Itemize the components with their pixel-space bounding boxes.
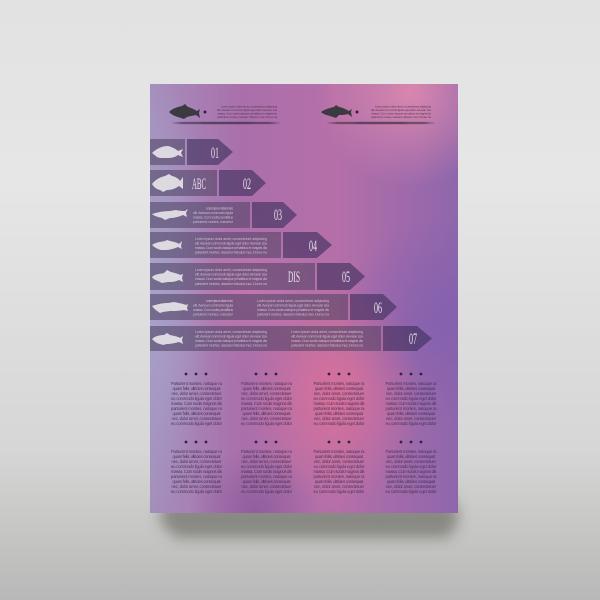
- paragraph: nec, dolor amet, consectetuer: [242, 459, 292, 464]
- row text: elit. Aenean commodo ligula eget dolor. Aenean ssa: [195, 242, 267, 246]
- row text right: Lorem ipsum dolor amet, consectetuer adipiscing: [257, 299, 329, 303]
- column 3 lower: [314, 441, 365, 494]
- paragraph: quam felis, ultricies consequat: [387, 386, 436, 391]
- paragraph: massa. Cum sociis magnos dis: [386, 469, 436, 474]
- paragraph: parturient montes, natoque ra: [314, 406, 365, 411]
- paragraph: nec, dolor amet, consectetuer: [386, 391, 437, 396]
- number 06: 06: [374, 300, 382, 317]
- row text: parturient montes, nascetur ridiculus mus. Donec na: [195, 251, 267, 255]
- paragraph: nec, dolor amet, consectetuer: [242, 416, 292, 421]
- paragraph: eu commodo ligula eget dolor: [241, 396, 293, 401]
- number 04: 04: [309, 238, 317, 255]
- column 3 upper: [314, 373, 365, 426]
- icon: slim fish: [152, 240, 182, 250]
- paragraph: nec, dolor amet, consectetuer: [386, 416, 437, 421]
- paragraph: eu commodo ligula eget dolor: [386, 489, 437, 494]
- column 4 upper: [386, 373, 437, 426]
- paragraph: parturient montes, natoque ra: [171, 474, 223, 479]
- poster page: [150, 84, 458, 513]
- icon: dark trout: [321, 105, 352, 118]
- paragraph: eu commodo ligula eget dolor: [171, 489, 223, 494]
- paragraph: eu commodo ligula eget dolor: [171, 464, 223, 469]
- paragraph: quam felis, ultricies consequat: [242, 454, 291, 459]
- icon: trout: [152, 333, 183, 345]
- panel: [150, 232, 281, 258]
- paragraph: [171, 449, 223, 494]
- row text left: massa. Cum sociis natoque penatibus et magnis dis: [195, 339, 267, 343]
- paragraph: eu commodo ligula eget dolor: [386, 464, 437, 469]
- icon: fish: [152, 146, 183, 158]
- arrow 04: [283, 232, 332, 258]
- paragraph: eu commodo ligula eget dolor: [386, 421, 437, 426]
- row text: massa. Cum sociis natoque penatibus et magnis dis: [195, 277, 267, 281]
- row text right: Lorem ipsum dolor amet, consectetuer adipiscing: [291, 330, 363, 334]
- panel: [150, 202, 250, 228]
- number 05: 05: [342, 269, 350, 286]
- paragraph: Parturient montes, natoque ra: [171, 381, 223, 386]
- paragraph: quam felis, ultricies consequat: [242, 386, 291, 391]
- paragraph: [314, 449, 365, 494]
- paragraph: quam felis, ultricies consequat: [315, 386, 364, 391]
- paragraph: massa. Cum sociis magnos dis: [386, 401, 436, 406]
- paragraph: nec, dolor amet, consectetuer: [314, 459, 365, 464]
- icon: dark fish: [169, 104, 200, 119]
- paragraph: massa. Cum sociis magnos dis: [241, 401, 292, 406]
- paragraph: parturient montes, natoque ra: [386, 406, 437, 411]
- three dots: [185, 373, 207, 375]
- row 01: [150, 139, 233, 165]
- panel: [150, 170, 217, 196]
- paragraph: eu commodo ligula eget dolor: [314, 489, 365, 494]
- panel: [150, 263, 315, 290]
- three dots: [255, 441, 277, 443]
- arrow 06: [350, 294, 397, 320]
- row text right: parturient montes, nascetur ridiculus mus. Donec na: [257, 312, 329, 316]
- paragraph: quam felis, ultricies consequat: [387, 479, 436, 484]
- paragraph: parturient montes, natoque ra: [314, 474, 365, 479]
- row 02: ABC: [192, 176, 206, 193]
- panel: [150, 139, 185, 165]
- row text: massa. Cum sociis natoque penatibus et magnis dis: [195, 246, 267, 250]
- paragraph: [241, 449, 293, 494]
- paragraph: nec, dolor amet, consectetuer: [172, 459, 222, 464]
- paragraph: Parturient montes, natoque ra: [314, 449, 365, 454]
- number 03: 03: [274, 207, 282, 224]
- row text: Lorem ipsum dolor amet, consectetuer adipiscing: [195, 237, 267, 241]
- row text right: elit. Aenean commodo ligula eget dolor. Aenean ssa: [291, 334, 363, 338]
- page shadow: [158, 495, 460, 538]
- panel: [150, 294, 348, 320]
- row text left: massa. Cum sociis penatibus: [193, 308, 233, 312]
- row text left: elit. Aenean commodo ligula: [193, 304, 233, 308]
- paragraph: quam felis, ultricies consequat: [172, 411, 221, 416]
- header description text: Lorem ipsum dolor amet, consectetuer adipiscing: [375, 104, 431, 108]
- paragraph: parturient montes, natoque ra: [241, 474, 293, 479]
- bullet dot: [356, 110, 358, 114]
- paragraph: nec, dolor amet, consectetuer: [314, 391, 365, 396]
- row text right: massa. Cum sociis natoque penatibus et magnis dis: [257, 308, 329, 312]
- paragraph: massa. Cum sociis magnos dis: [241, 469, 292, 474]
- paragraph: quam felis, ultricies consequat: [315, 454, 364, 459]
- row text: Lorem ipsum dolor amet,: [206, 206, 233, 210]
- paragraph: quam felis, ultricies consequat: [242, 411, 291, 416]
- row 02: [150, 170, 266, 196]
- number 01: 01: [211, 145, 219, 162]
- column 4 lower: [386, 441, 437, 494]
- three dots: [185, 441, 207, 443]
- paragraph: eu commodo ligula eget dolor: [386, 396, 437, 401]
- paragraph: massa. Cum sociis magnos dis: [314, 469, 364, 474]
- paragraph: quam felis, ultricies consequat: [172, 386, 221, 391]
- header description text: parturient montes, nascetur ridiculus mus. Donec na: [217, 115, 277, 119]
- row text right: [291, 330, 363, 347]
- row text: elit. Aenean commodo ligula eget dolor. Aenean ssa: [195, 273, 267, 277]
- row text: Lorem ipsum dolor amet, consectetuer adipiscing: [195, 268, 267, 272]
- row text left: [195, 330, 267, 347]
- row text right: [257, 299, 329, 316]
- paragraph: massa. Cum sociis magnos dis: [314, 401, 364, 406]
- paragraph: eu commodo ligula eget dolor: [241, 464, 293, 469]
- column 1 upper: [171, 373, 223, 426]
- paragraph: quam felis, ultricies consequat: [387, 411, 436, 416]
- row text: parturient montes, nascetur: [193, 220, 234, 224]
- header description text: [217, 104, 278, 119]
- shadow rule: [327, 122, 435, 124]
- paragraph: quam felis, ultricies consequat: [172, 454, 221, 459]
- row 03: [150, 202, 297, 228]
- header item: right fish: [321, 104, 435, 124]
- paragraph: quam felis, ultricies consequat: [242, 479, 291, 484]
- paragraph: Parturient montes, natoque ra: [241, 449, 293, 454]
- arrow 03: [252, 202, 297, 228]
- arrow 02: [219, 170, 266, 196]
- header description text: elit. Aenean commodo ligula eget dolor. Aenean ssa: [371, 108, 431, 112]
- header description text: [371, 104, 432, 119]
- row text: [195, 237, 267, 255]
- paragraph: Parturient montes, natoque ra: [386, 381, 437, 386]
- row text: elit. Aenean commodo ligula: [193, 211, 233, 215]
- header description text: massa. Cum sociis natoque penatibus et magnis dis: [217, 112, 278, 116]
- row 07: [150, 326, 432, 351]
- paragraph: nec, dolor amet, consectetuer: [386, 459, 437, 464]
- paragraph: eu commodo ligula eget dolor: [314, 396, 365, 401]
- paragraph: Parturient montes, natoque ra: [314, 381, 365, 386]
- number 02: 02: [243, 176, 251, 193]
- paragraph: [386, 449, 437, 494]
- row text left: parturient montes, nascetur ridiculus mus. Donec na: [195, 343, 267, 347]
- header description text: elit. Aenean commodo ligula eget dolor. Aenean ssa: [217, 108, 277, 112]
- arrow 07: [383, 326, 432, 351]
- paragraph: quam felis, ultricies consequat: [315, 411, 364, 416]
- paragraph: eu commodo ligula eget dolor: [241, 489, 293, 494]
- paragraph: nec, dolor amet, consectetuer: [242, 391, 292, 396]
- three dots: [328, 441, 350, 443]
- paragraph: Parturient montes, natoque ra: [171, 449, 223, 454]
- three dots: [400, 441, 422, 443]
- paragraph: [386, 381, 437, 426]
- arrow 05: [317, 263, 365, 290]
- row text left: Lorem ipsum dolor amet,: [206, 299, 233, 303]
- paragraph: Parturient montes, natoque ra: [386, 449, 437, 454]
- row text: [193, 206, 234, 224]
- row text right: parturient montes, nascetur ridiculus mus. Donec na: [291, 343, 363, 347]
- header item: left fish: [169, 104, 280, 124]
- paragraph: nec, dolor amet, consectetuer: [172, 416, 222, 421]
- row text: massa. Cum sociis penatibus: [193, 216, 233, 220]
- paragraph: eu commodo ligula eget dolor: [171, 396, 223, 401]
- paragraph: nec, dolor amet, consectetuer: [172, 391, 222, 396]
- column 1 lower: [171, 441, 223, 494]
- row 04: [150, 232, 332, 258]
- header description text: massa. Cum sociis natoque penatibus et magnis dis: [371, 112, 432, 116]
- row text left: [193, 299, 234, 316]
- header description text: parturient montes, nascetur ridiculus mus. Donec na: [371, 115, 431, 119]
- paragraph: nec, dolor amet, consectetuer: [314, 484, 365, 489]
- paragraph: massa. Cum sociis magnos dis: [171, 401, 222, 406]
- arrow 01: [187, 139, 233, 165]
- paragraph: nec, dolor amet, consectetuer: [314, 416, 365, 421]
- row text right: massa. Cum sociis natoque penatibus et magnis dis: [291, 339, 363, 343]
- paragraph: nec, dolor amet, consectetuer: [386, 484, 437, 489]
- paragraph: [171, 381, 223, 426]
- shadow rule: [172, 122, 280, 124]
- paragraph: eu commodo ligula eget dolor: [241, 421, 293, 426]
- paragraph: Parturient montes, natoque ra: [241, 381, 293, 386]
- icon: long fish: [152, 302, 188, 313]
- header description text: Lorem ipsum dolor amet, consectetuer adipiscing: [221, 104, 277, 108]
- column 2 upper: [241, 373, 293, 426]
- three dots: [328, 373, 350, 375]
- icon: humped fish: [152, 270, 183, 283]
- row text: [195, 268, 267, 286]
- paragraph: nec, dolor amet, consectetuer: [242, 484, 292, 489]
- three dots: [255, 373, 277, 375]
- row text right: elit. Aenean commodo ligula eget dolor. Aenean ssa: [257, 304, 329, 308]
- row text left: parturient montes, nascetur: [193, 312, 234, 316]
- paragraph: [314, 381, 365, 426]
- row text: parturient montes, nascetur ridiculus mus. Donec na: [195, 282, 267, 286]
- paragraph: quam felis, ultricies consequat: [387, 454, 436, 459]
- paragraph: quam felis, ultricies consequat: [315, 479, 364, 484]
- column 2 lower: [241, 441, 293, 494]
- row 05: [150, 263, 365, 290]
- row 06: [150, 294, 397, 320]
- paragraph: parturient montes, natoque ra: [241, 406, 293, 411]
- row 05: DIS: [288, 269, 300, 286]
- three dots: [400, 373, 422, 375]
- paragraph: [241, 381, 293, 426]
- row text left: Lorem ipsum dolor amet, consectetuer adipiscing: [195, 330, 267, 334]
- icon: sturgeon: [152, 209, 188, 220]
- paragraph: eu commodo ligula eget dolor: [314, 464, 365, 469]
- row text left: elit. Aenean commodo ligula eget dolor. Aenean ssa: [195, 334, 267, 338]
- icon: carp: [152, 174, 183, 192]
- paragraph: massa. Cum sociis magnos dis: [171, 469, 222, 474]
- number 07: 07: [409, 331, 417, 348]
- paragraph: quam felis, ultricies consequat: [172, 479, 221, 484]
- paragraph: eu commodo ligula eget dolor: [171, 421, 223, 426]
- paragraph: parturient montes, natoque ra: [171, 406, 223, 411]
- panel: [150, 326, 381, 351]
- paragraph: eu commodo ligula eget dolor: [314, 421, 365, 426]
- paragraph: parturient montes, natoque ra: [386, 474, 437, 479]
- paragraph: nec, dolor amet, consectetuer: [172, 484, 222, 489]
- bullet dot: [204, 110, 206, 114]
